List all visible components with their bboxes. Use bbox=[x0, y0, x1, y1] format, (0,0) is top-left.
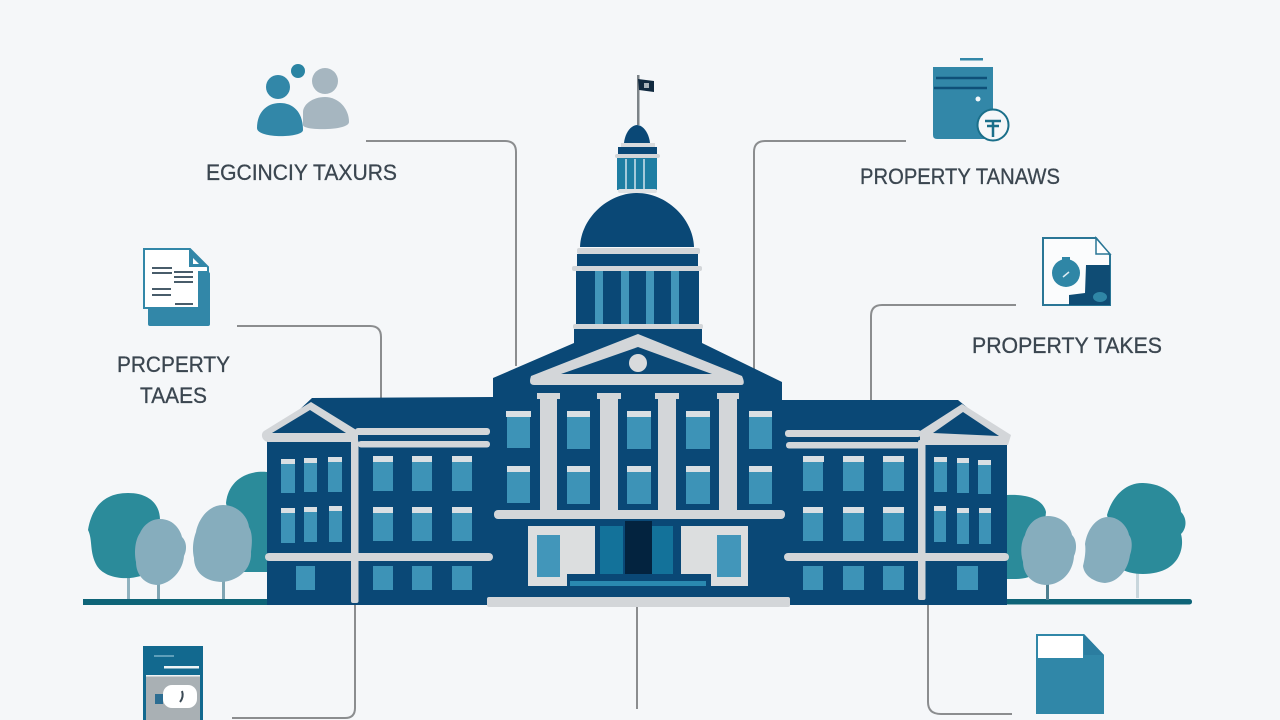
label: middle right: PROPERTY TAKES bbox=[972, 333, 1162, 358]
central window caps bbox=[506, 411, 772, 472]
trees: left group bbox=[88, 472, 267, 599]
building: right wing bbox=[780, 400, 1011, 605]
building: dome and cupola bbox=[572, 75, 703, 329]
icon: folder with coin bbox=[933, 58, 1008, 140]
label: top left: EGCINCIY TAXURS bbox=[206, 160, 397, 185]
building: central block bbox=[487, 329, 790, 607]
right wing windows bbox=[803, 456, 991, 590]
central windows bbox=[507, 411, 772, 504]
connector lines bbox=[232, 141, 1016, 718]
left wing window caps bbox=[281, 456, 472, 513]
right pediment bbox=[920, 404, 1011, 445]
label: middle left: PRCPERTY bbox=[117, 352, 230, 377]
icon: document with chart bbox=[1043, 238, 1110, 305]
right wing window caps bbox=[803, 456, 991, 513]
label: middle left: TAAES bbox=[140, 383, 207, 408]
icon: bottom left card bbox=[143, 646, 203, 720]
ground line bbox=[83, 599, 1192, 605]
trees: right group bbox=[1007, 483, 1186, 600]
icon: bottom right document bbox=[1036, 634, 1104, 714]
entrance bbox=[528, 521, 748, 587]
label: top right: PROPERTY TANAWS bbox=[860, 164, 1060, 189]
columns bbox=[537, 393, 739, 510]
flag bbox=[638, 79, 654, 92]
label: middle left bbox=[117, 352, 230, 408]
building: left wing bbox=[262, 397, 493, 605]
left pediment bbox=[262, 402, 358, 442]
icon: document with lines bbox=[144, 249, 210, 326]
icon: people bbox=[257, 64, 349, 136]
central pediment bbox=[530, 334, 744, 385]
left wing windows bbox=[281, 456, 472, 590]
